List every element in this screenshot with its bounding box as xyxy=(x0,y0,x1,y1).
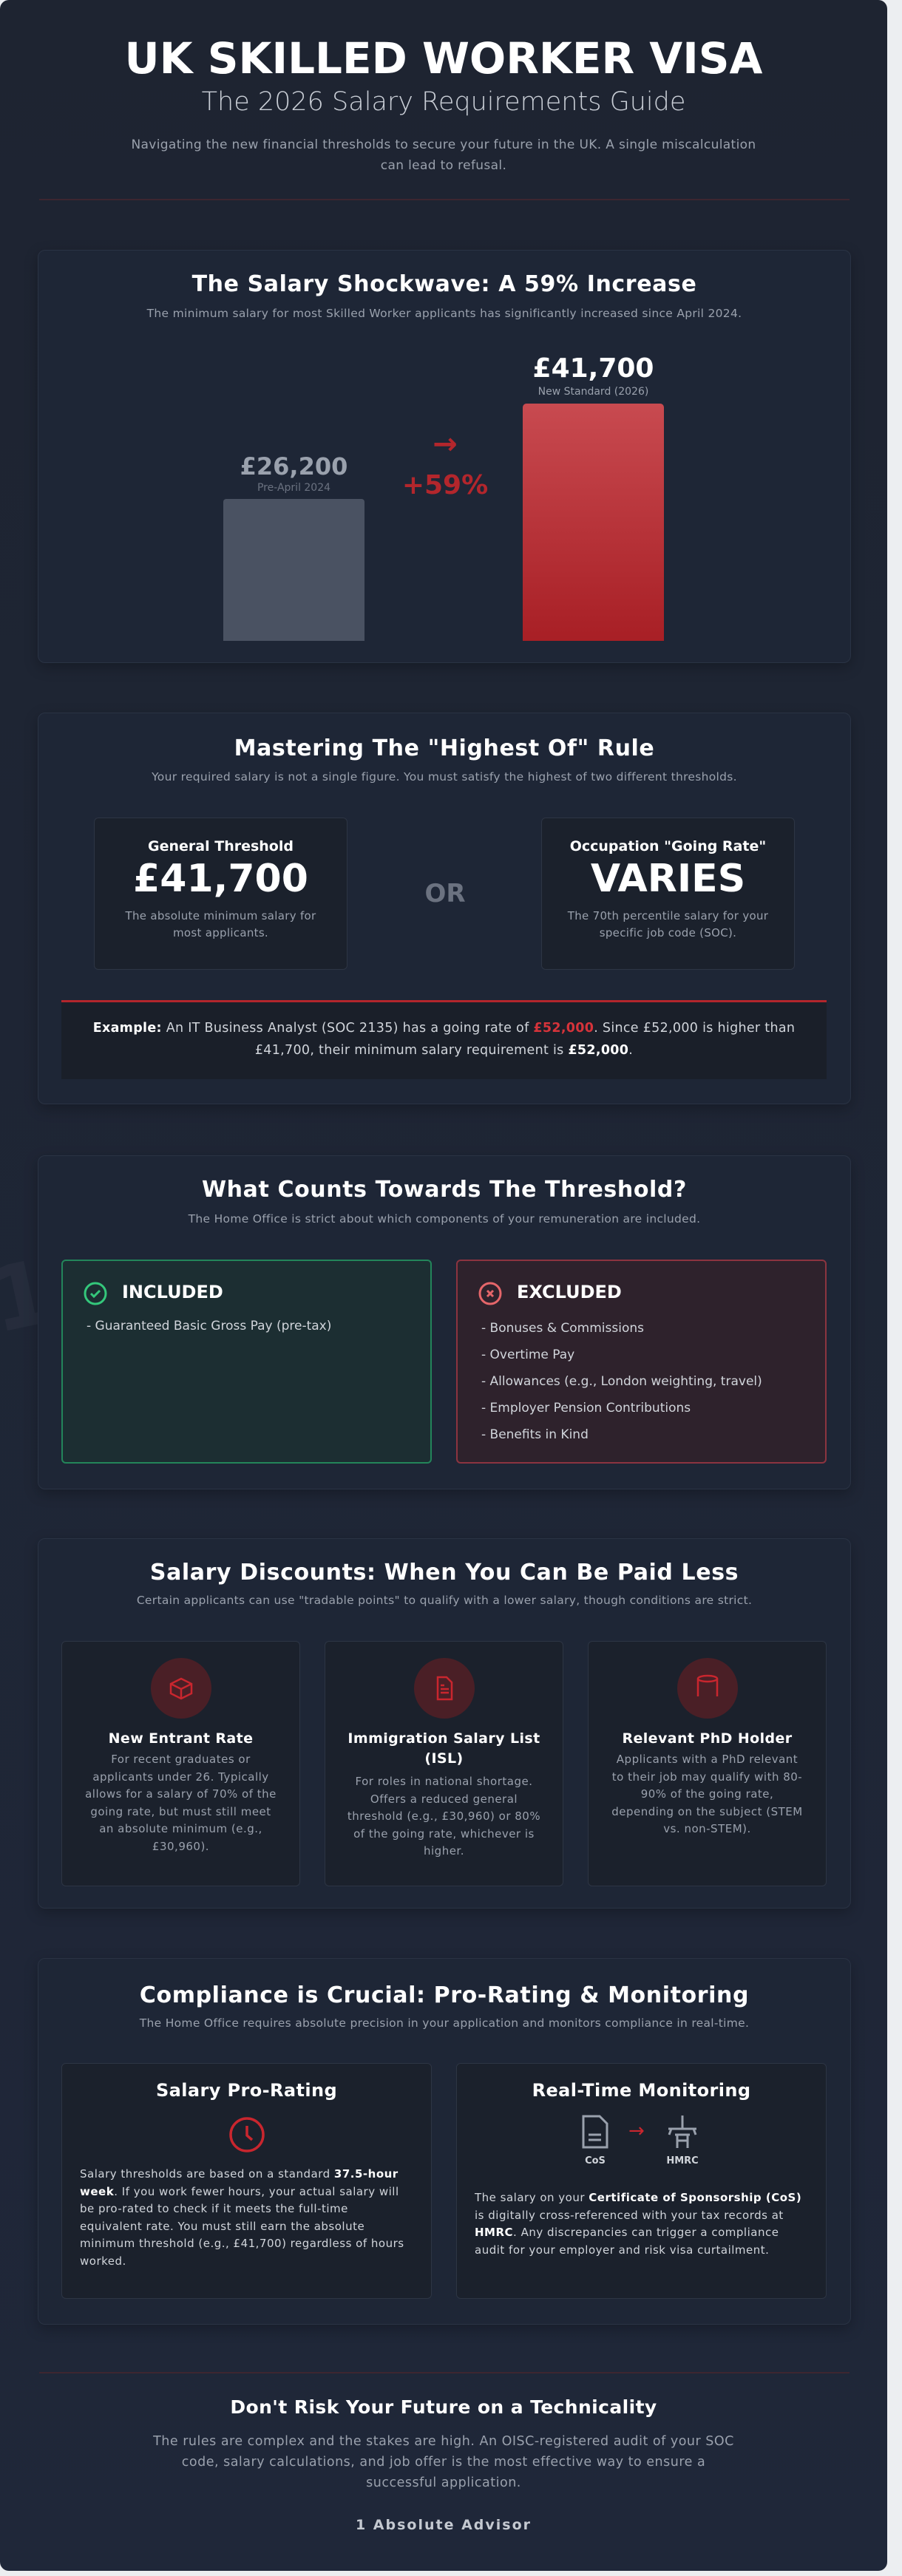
box: excluded xyxy=(456,1260,827,1464)
card: ISL: For roles in national shortage. Offers a reduced general threshold (e.g., £30,960) or 80% of the going rate, whichever is higher. xyxy=(347,1775,540,1858)
subheading: Your required salary is not a single figure. You must satisfy the highest of two different thresholds. xyxy=(152,770,737,784)
example callout xyxy=(61,1000,827,1079)
box: included: - Guaranteed Basic Gross Pay (pre-tax) xyxy=(87,1319,331,1333)
bar: pre-april 2024: £26,200 xyxy=(240,452,347,480)
icon: clock xyxy=(229,2117,265,2152)
arrow and percentage xyxy=(402,427,488,500)
arrow and percentage: → xyxy=(433,427,458,461)
heading: Salary Discounts: When You Can Be Paid Less xyxy=(150,1560,739,1586)
icon: cross xyxy=(479,1282,501,1305)
box: pro-rating: Salary Pro-Rating xyxy=(156,2080,337,2101)
card: ISL xyxy=(325,1641,563,1886)
box: going rate: The 70th percentile salary for your specific job code (SOC). xyxy=(568,909,768,939)
subheading: The Home Office is strict about which components of your remuneration are included. xyxy=(189,1212,700,1226)
card: new entrant xyxy=(61,1641,300,1886)
footer heading: Don't Risk Your Future on a Technicality xyxy=(230,2396,657,2418)
subheading: The minimum salary for most Skilled Worker applicants has significantly increased since April 2024. xyxy=(147,307,742,320)
box: excluded: EXCLUDED xyxy=(517,1282,622,1302)
panel: salary discounts xyxy=(38,1538,851,1909)
footer brand: 1 Absolute Advisor xyxy=(356,2517,532,2533)
box: pro-rating xyxy=(61,2063,432,2299)
panel: highest of rule xyxy=(38,713,851,1104)
box: included xyxy=(61,1260,432,1464)
bar: pre-april 2024: Pre-April 2024 xyxy=(257,482,330,494)
icon: CoS to HMRC diagram: HMRC xyxy=(666,2155,699,2167)
bar: new standard 2026 xyxy=(523,353,664,641)
icon: cylinder xyxy=(677,1658,738,1719)
subheading: The Home Office requires absolute precision in your application and monitors compliance in real-time. xyxy=(140,2016,749,2030)
card: PhD xyxy=(588,1641,827,1886)
icon: CoS to HMRC diagram: CoS xyxy=(585,2155,606,2167)
card: new entrant: For recent graduates or applicants under 26. Typically allows for a salary of 70% of the going rate, but must still meet an absolute minimum (e.g., £30,960). xyxy=(85,1753,277,1852)
box: going rate: Occupation "Going Rate" xyxy=(570,838,766,854)
box: excluded: - Allowances (e.g., London weighting, travel) xyxy=(481,1374,762,1389)
box: excluded: - Bonuses & Commissions xyxy=(481,1321,644,1336)
arrow and percentage: +59% xyxy=(402,470,488,500)
icon: CoS to HMRC diagram xyxy=(583,2115,699,2167)
heading: What Counts Towards The Threshold? xyxy=(202,1177,687,1203)
panel: compliance xyxy=(38,1958,851,2325)
intro text: Navigating the new financial thresholds to secure your future in the UK. A single miscalculation can lead to refusal. xyxy=(131,137,756,173)
card: PhD: Relevant PhD Holder xyxy=(622,1730,793,1747)
box: general threshold xyxy=(94,818,347,970)
bar: new standard 2026: £41,700 xyxy=(533,353,654,384)
box: excluded: - Employer Pension Contributions xyxy=(481,1401,691,1416)
box: general threshold: The absolute minimum salary for most applicants. xyxy=(126,909,316,939)
footer text: The rules are complex and the stakes are high. An OISC-registered audit of your SOC code, salary calculations, and job offer is the most effective way to ensure a successful application. xyxy=(153,2434,734,2490)
box: going rate: VARIES xyxy=(591,857,745,901)
bar: new standard 2026: New Standard (2026) xyxy=(538,386,648,398)
box: pro-rating: Salary thresholds are based on a standard 37.5-hour week. If you work fewer hours, your actual salary will be pro-rated to check if it meets the full-time equivalent rate. You must still earn the absolute minimum threshold (e.g., £41,700) regardless of hours worked. xyxy=(80,2167,404,2268)
title: UK SKILLED WORKER VISA xyxy=(125,33,762,84)
icon: document xyxy=(414,1658,475,1719)
subtitle: The 2026 Salary Requirements Guide xyxy=(202,87,685,117)
panel: what counts xyxy=(38,1155,851,1489)
card: ISL: Immigration Salary List (ISL) xyxy=(347,1730,540,1767)
box: excluded: - Overtime Pay xyxy=(481,1348,574,1362)
box: monitoring: Real-Time Monitoring xyxy=(532,2080,750,2101)
heading: Mastering The "Highest Of" Rule xyxy=(234,735,654,761)
panel: salary shockwave xyxy=(38,250,851,663)
icon: box xyxy=(151,1658,211,1719)
bar chart xyxy=(223,353,664,641)
box: general threshold: £41,700 xyxy=(133,857,308,901)
box: included: INCLUDED xyxy=(122,1282,223,1302)
icon: CoS to HMRC diagram: → xyxy=(628,2120,645,2142)
heading: Compliance is Crucial: Pro-Rating & Monitoring xyxy=(140,1982,749,2008)
heading: The Salary Shockwave: A 59% Increase xyxy=(192,271,696,297)
box: monitoring xyxy=(456,2063,827,2299)
box: general threshold: General Threshold xyxy=(148,838,294,854)
subheading: Certain applicants can use "tradable points" to qualify with a lower salary, though conditions are strict. xyxy=(137,1594,752,1607)
OR label: OR xyxy=(424,879,466,908)
card: new entrant: New Entrant Rate xyxy=(109,1730,253,1747)
box: excluded: - Benefits in Kind xyxy=(481,1427,589,1442)
bar: pre-april 2024 xyxy=(223,452,364,641)
box: monitoring: The salary on your Certificate of Sponsorship (CoS) is digitally cross-referenced with your tax records at HMRC. Any discrepancies can trigger a compliance audit for your employer and risk visa curtailment. xyxy=(475,2191,801,2256)
icon: check xyxy=(84,1282,106,1305)
example callout: Example: An IT Business Analyst (SOC 2135) has a going rate of £52,000. Since £52,000 is higher than £41,700, their minimum salary requirement is £52,000. xyxy=(93,1021,795,1058)
box: going rate xyxy=(541,818,795,970)
card: PhD: Applicants with a PhD relevant to their job may qualify with 80-90% of the going rate, depending on the subject (STEM vs. non-STEM). xyxy=(611,1753,803,1835)
